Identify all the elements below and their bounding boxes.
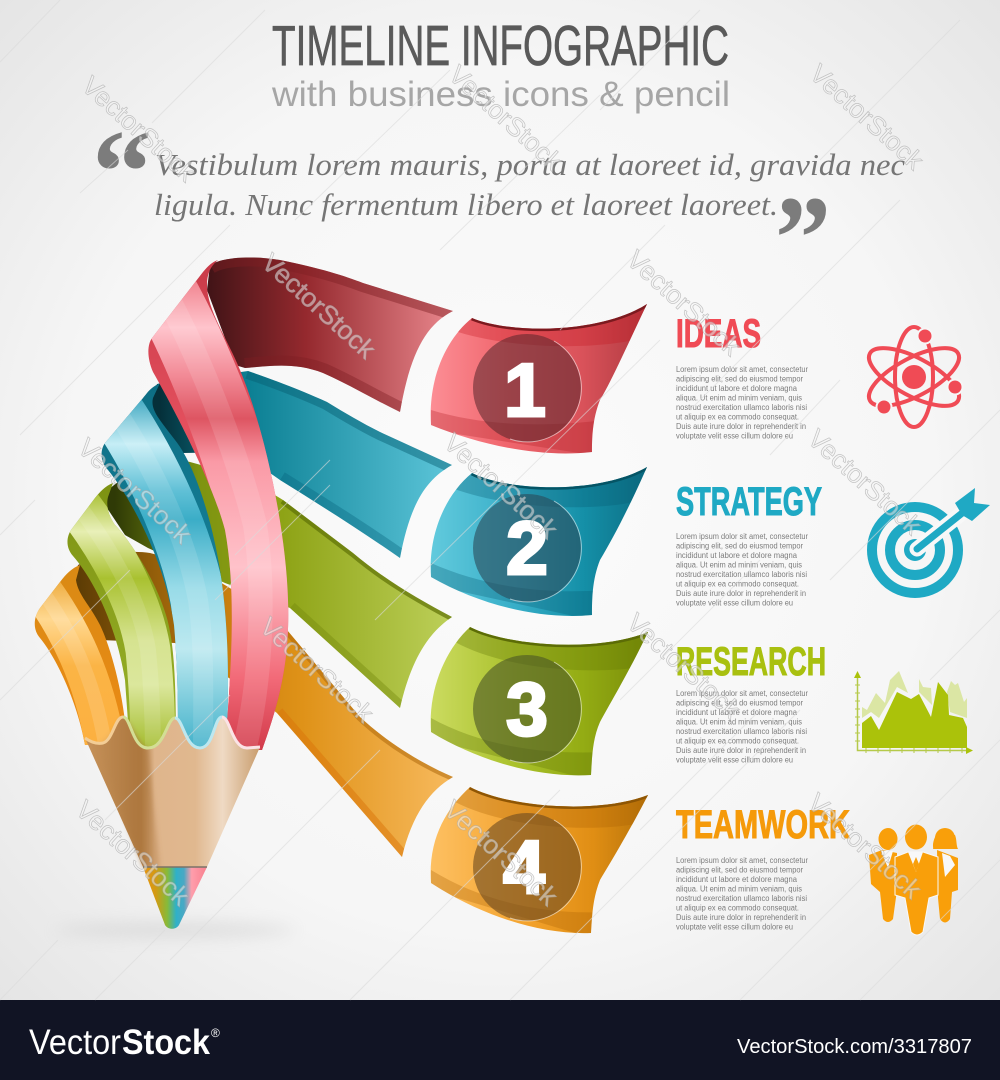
number badge 1: 1 bbox=[504, 348, 546, 432]
subtitle: with business icons & pencil bbox=[271, 75, 730, 114]
footer bar: Vector bbox=[29, 1023, 121, 1062]
back ribbon: blue bbox=[150, 365, 460, 565]
text block: teamwork: Duis aute irure dolor in reprehenderit in bbox=[676, 913, 806, 922]
title: TIMELINE INFOGRAPHIC bbox=[272, 14, 729, 78]
text block: research: adipiscing elit, sed do eiusmod tempor bbox=[676, 698, 803, 708]
chart icon: area chart bbox=[854, 671, 973, 754]
icon: target with arrow bbox=[872, 488, 990, 593]
text block: teamwork: nostrud exercitation ullamco laboris nisi bbox=[676, 894, 807, 903]
watermarks: VectorStock bbox=[256, 247, 382, 365]
text block: ideas: incididunt ut labore et dolore magna bbox=[676, 384, 798, 393]
text block: ideas: Lorem ipsum dolor sit amet, consectetur bbox=[676, 365, 808, 374]
text block: research: incididunt ut labore et dolore magna bbox=[676, 708, 798, 717]
footer bar: ® bbox=[211, 1026, 220, 1040]
number badge 4 bbox=[473, 813, 581, 921]
text block: strategy: voluptate velit esse cillum dolore eu bbox=[676, 598, 793, 608]
heading: teamwork: TEAMWORK bbox=[676, 803, 850, 847]
icon: team of three people bbox=[869, 824, 958, 935]
watermarks: VectorStock bbox=[621, 244, 747, 362]
flag 4 bbox=[430, 787, 648, 934]
back ribbon: orange bbox=[70, 540, 460, 860]
text block: teamwork: Lorem ipsum dolor sit amet, consectetur bbox=[676, 856, 808, 865]
icon: closing quote mark: ” bbox=[775, 171, 831, 304]
text block: ideas: aliqua. Ut enim ad minim veniam, quis bbox=[676, 394, 802, 402]
text block: research bbox=[676, 689, 808, 764]
heading: research: RESEARCH bbox=[676, 640, 826, 684]
text block: research: aliqua. Ut enim ad minim veniam, quis bbox=[676, 718, 802, 726]
number badge 1 bbox=[473, 334, 581, 442]
watermarks: VectorStock bbox=[621, 607, 747, 725]
text block: teamwork: aliqua. Ut enim ad minim veniam, quis bbox=[676, 884, 802, 894]
text block: research: voluptate velit esse cillum dolore eu bbox=[676, 756, 793, 764]
text block: strategy: nostrud exercitation ullamco laboris nisi bbox=[676, 570, 807, 579]
pencil lead tip bbox=[143, 867, 207, 929]
watermarks: VectorStock bbox=[254, 611, 380, 729]
watermarks: VectorStock bbox=[802, 787, 928, 905]
text block: strategy: Duis aute irure dolor in reprehenderit in bbox=[676, 589, 806, 598]
text block: teamwork: incididunt ut labore et dolore magna bbox=[676, 875, 798, 884]
front ribbon: blue bbox=[102, 383, 228, 746]
quote text bbox=[154, 147, 905, 222]
back ribbon: green bbox=[105, 450, 460, 715]
number badge 2 bbox=[473, 494, 581, 602]
footer bar bbox=[0, 1000, 1000, 1080]
text block: strategy: adipiscing elit, sed do eiusmod tempor bbox=[676, 542, 803, 550]
watermarks: VectorStock bbox=[438, 794, 564, 912]
text block: ideas bbox=[676, 365, 808, 440]
text block: teamwork: ut aliquip ex ea commodo consequat. bbox=[676, 904, 799, 912]
pencil scallop outline bbox=[85, 717, 260, 748]
front ribbon: orange bbox=[34, 565, 124, 745]
watermarks: VectorStock bbox=[804, 58, 930, 176]
front ribbon: green bbox=[67, 483, 176, 746]
text block: teamwork bbox=[676, 856, 808, 932]
number badge 2: 2 bbox=[506, 506, 548, 590]
pencil bbox=[85, 717, 260, 929]
icon: opening quote mark: “ bbox=[92, 105, 152, 238]
front ribbon: red bbox=[148, 260, 288, 750]
text block: research: ut aliquip ex ea commodo consequat. bbox=[676, 736, 799, 746]
number badge 3: 3 bbox=[506, 667, 548, 751]
text block: ideas: adipiscing elit, sed do eiusmod tempor bbox=[676, 374, 803, 384]
watermarks: VectorStock bbox=[70, 794, 196, 912]
text block: research: Duis aute irure dolor in reprehenderit in bbox=[676, 746, 806, 755]
footer bar: VectorStock.com/3317807 bbox=[737, 1036, 972, 1058]
text block: ideas: Duis aute irure dolor in reprehenderit in bbox=[676, 422, 806, 431]
text block: ideas: ut aliquip ex ea commodo consequat. bbox=[676, 412, 799, 422]
watermarks: VectorStock bbox=[72, 432, 198, 550]
text block: strategy: Lorem ipsum dolor sit amet, consectetur bbox=[676, 532, 808, 541]
number badge 3 bbox=[473, 655, 581, 763]
watermarks: VectorStock bbox=[438, 427, 564, 545]
quote text: Vestibulum lorem mauris, porta at laoreet id, gravida nec bbox=[155, 147, 905, 182]
text block: research: Lorem ipsum dolor sit amet, consectetur bbox=[676, 689, 808, 698]
watermarks: VectorStock bbox=[76, 70, 202, 188]
text block: ideas: nostrud exercitation ullamco laboris nisi bbox=[676, 403, 807, 412]
watermarks bbox=[70, 58, 930, 912]
text block: teamwork: voluptate velit esse cillum dolore eu bbox=[676, 922, 793, 932]
text block: strategy: ut aliquip ex ea commodo consequat. bbox=[676, 580, 799, 588]
text block: strategy: aliqua. Ut enim ad minim veniam, quis bbox=[676, 560, 802, 570]
text block: research: nostrud exercitation ullamco laboris nisi bbox=[676, 727, 807, 736]
footer bar: Stock bbox=[122, 1023, 210, 1062]
text block: strategy: incididunt ut labore et dolore magna bbox=[676, 551, 798, 560]
watermarks: VectorStock bbox=[802, 423, 928, 541]
pencil shadow bbox=[55, 923, 295, 937]
number badge 4: 4 bbox=[503, 825, 545, 909]
back ribbon: red bbox=[207, 258, 453, 412]
icon: atom bbox=[861, 327, 967, 427]
flag 3 bbox=[430, 627, 648, 776]
heading: ideas: IDEAS bbox=[676, 312, 761, 356]
text block: strategy bbox=[676, 532, 808, 608]
pencil wood bbox=[85, 717, 260, 867]
text block: teamwork: adipiscing elit, sed do eiusmod tempor bbox=[676, 866, 803, 874]
text block: ideas: voluptate velit esse cillum dolore eu bbox=[676, 432, 793, 440]
flag 2 bbox=[430, 467, 647, 616]
quote text: ligula. Nunc fermentum libero et laoreet laoreet. bbox=[154, 187, 778, 222]
flag 1 bbox=[430, 304, 647, 454]
watermarks: VectorStock bbox=[443, 59, 569, 177]
heading: strategy: STRATEGY bbox=[676, 480, 822, 524]
